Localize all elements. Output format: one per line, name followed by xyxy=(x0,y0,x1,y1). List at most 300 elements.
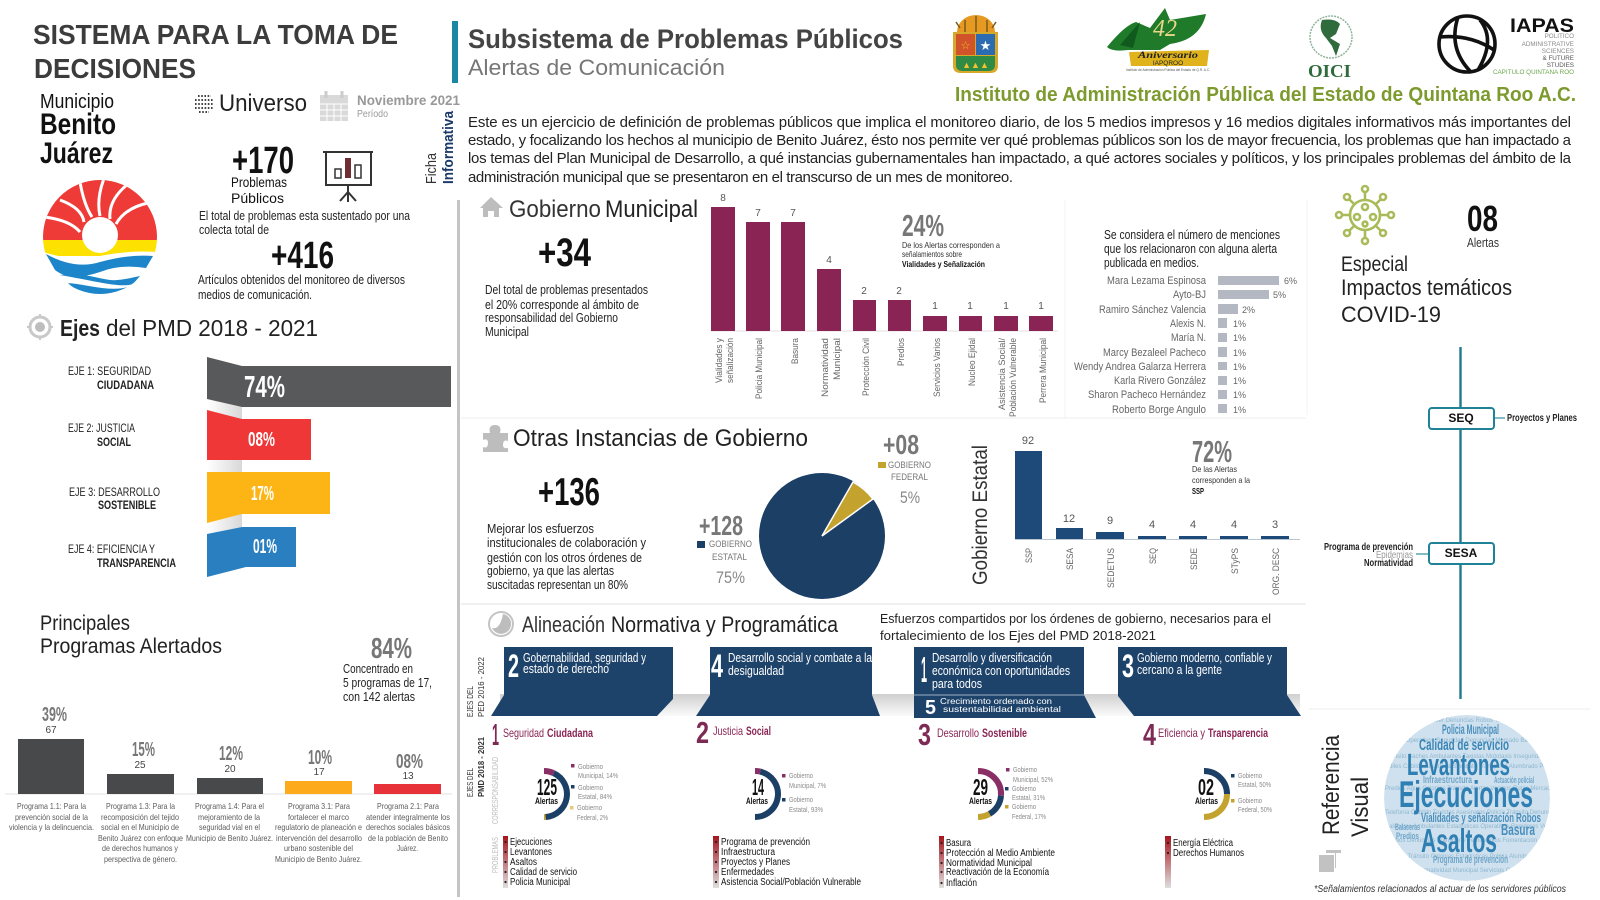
callout: 24 percent xyxy=(902,208,1000,269)
bar chart: programas: 15% xyxy=(132,739,155,761)
heading: universo: Universo xyxy=(219,90,307,117)
panel: menciones de actores xyxy=(1074,227,1297,416)
legend: gobierno estatal: ESTATAL xyxy=(712,552,747,563)
box: eje PED 4: Desarrollo social y combate a la xyxy=(728,651,872,665)
heading: eje 1 xyxy=(492,717,593,752)
timeline: Programa de prevención xyxy=(1324,542,1413,553)
intro paragraph: administración municipal que se presentaron en el transcurso de un mes de monitoreo. xyxy=(468,169,1013,186)
icon: IAPQROO anniversary logo: IAPQROO xyxy=(1153,60,1183,67)
bar chart: gobierno estatal xyxy=(1015,435,1300,595)
heading: eje 3 xyxy=(918,717,1027,752)
legend: donut 14: Gobierno xyxy=(789,795,813,804)
bar chart: problemas municipales: 1 xyxy=(932,301,938,312)
callout: 24 percent: señalamientos sobre xyxy=(902,249,962,259)
bar chart: problemas municipales: 2 xyxy=(861,286,867,297)
icon: IAPAS globe and name: IAPAS xyxy=(1510,16,1574,37)
bar chart: programas: de la población de Benito xyxy=(368,833,448,843)
text: esfuerzos compartidos: fortalecimiento de los Ejes del PMD 2018-2021 xyxy=(880,628,1156,643)
timeline: Epidemias xyxy=(1376,550,1413,561)
bar chart: problemas municipales: Policia Municipal xyxy=(754,338,765,399)
vertical label: ejes del PMD: EJES DEL xyxy=(465,768,475,797)
ejes labels: SOCIAL xyxy=(97,435,131,449)
bar chart: gobierno estatal: 4 xyxy=(1231,519,1237,531)
bar chart: problemas municipales: Vialidades y xyxy=(714,338,725,383)
callout: 72 percent xyxy=(1192,434,1250,496)
box: eje PED 1 y 5: 5 xyxy=(925,697,936,719)
bar chart: programas: social en el Municipio de xyxy=(101,822,179,832)
icon: target xyxy=(27,314,53,340)
list: problemas eje 1: Asaltos xyxy=(510,857,537,868)
list: problemas eje 1: Levantones xyxy=(510,847,552,858)
legend: donut 29: Estatal, 31% xyxy=(1012,793,1045,802)
bar chart: programas: violencia y la delincuencia. xyxy=(9,822,94,832)
legend: donut 29: Federal, 17% xyxy=(1012,812,1046,821)
bar chart: problemas municipales: Servicios Varios xyxy=(932,338,943,397)
heading: eje 2: Social xyxy=(746,724,771,738)
donut: 125 alertas: 125 xyxy=(537,774,557,800)
ejes labels: SOSTENIBLE xyxy=(98,498,156,512)
stat: problemas públicos: +170 xyxy=(232,140,294,182)
box: eje PED 1 y 5: sustentabilidad ambiental xyxy=(943,704,1061,714)
text: menciones intro xyxy=(1104,227,1280,270)
icon: Quintana Roo shield xyxy=(953,15,998,73)
box: eje PED 1 y 5: Crecimiento ordenado con xyxy=(940,696,1052,706)
bar chart: programas: urbano sostenible del xyxy=(284,843,353,853)
bar chart: gobierno estatal: 4 xyxy=(1190,519,1196,531)
legend: donut 125: Gobierno xyxy=(577,803,602,812)
bar chart: problemas municipales: 2 xyxy=(896,286,902,297)
bar chart: menciones: 1% xyxy=(1233,319,1246,329)
bar chart: programas: Programa 2.1: Para xyxy=(377,801,439,811)
bar chart: problemas municipales xyxy=(711,193,1058,417)
box: eje PED 2: 2 xyxy=(508,648,519,684)
shadow band behind PED boxes xyxy=(500,694,1300,716)
stat: artículos: +416 xyxy=(271,235,334,277)
word cloud xyxy=(1384,715,1550,881)
pie chart: estatal vs federal xyxy=(759,473,885,599)
icon: IAPAS globe and name: SCIENCES xyxy=(1542,48,1574,55)
stat: problemas públicos xyxy=(231,140,294,206)
bar chart: menciones: 1% xyxy=(1233,348,1246,358)
list: problemas eje 2: Proyectos y Planes xyxy=(721,857,790,868)
bar chart: programas: 20 xyxy=(224,764,236,775)
box: eje PED 1 y 5: Desarrollo y diversificación xyxy=(932,651,1052,665)
ficha informativa vertical label: Ficha xyxy=(423,152,440,184)
bar chart: gobierno estatal: 12 xyxy=(1063,513,1075,525)
box: eje PED 1 y 5: para todos xyxy=(932,677,982,691)
bar chart: menciones: 1% xyxy=(1233,405,1246,415)
bar chart: problemas municipales: 4 xyxy=(826,255,832,266)
donut: 02 alertas: Alertas xyxy=(1195,796,1218,806)
panel: especial covid xyxy=(1324,186,1577,699)
bar chart: gobierno estatal: 92 xyxy=(1022,435,1034,447)
word cloud: Basura xyxy=(1501,822,1535,839)
bar chart: programas: Programa 1.1: Para la xyxy=(17,801,86,811)
panel: referencia visual xyxy=(1314,715,1566,894)
stat: problemas públicos: Problemas xyxy=(231,174,287,190)
ejes labels: TRANSPARENCIA xyxy=(97,556,176,570)
list: problemas eje 2: Infraestructura xyxy=(721,847,775,858)
list: problemas eje 4: Derechos Humanos xyxy=(1173,848,1244,859)
donut: 02 alertas xyxy=(1195,771,1227,817)
stat: artículos: Artículos obtenidos del monitoreo de diversos xyxy=(198,272,405,287)
legend: donut 02: Estatal, 50% xyxy=(1238,780,1271,789)
municipality name: Juárez xyxy=(40,137,113,170)
text: gobierno municipal description: Municipal xyxy=(485,324,529,339)
icon: Quintana Roo shield: ▲▲▲ xyxy=(962,60,989,70)
ribbon chart: ejes percentages: 01% xyxy=(253,536,277,558)
vertical label: ejes del PED xyxy=(465,657,486,717)
bar chart: menciones: 1% xyxy=(1233,333,1246,343)
word cloud: Vialidades y señalización xyxy=(1421,810,1514,825)
heading: gobierno municipal: Gobierno xyxy=(509,196,601,223)
heading: impactos temáticos: Especial xyxy=(1341,253,1408,276)
bar chart: programas: fortalecer el marco xyxy=(288,812,349,822)
column: seguridad ciudadana xyxy=(492,717,618,888)
text: esfuerzos compartidos: Esfuerzos compartidos por los órdenes de gobierno, necesarios para el xyxy=(880,611,1271,626)
ejes labels xyxy=(68,364,176,570)
callout: 24 percent: 24% xyxy=(902,208,944,243)
list: problemas eje 3 xyxy=(939,836,1055,889)
legend: gobierno estatal: 75% xyxy=(716,568,745,587)
icon: universo dots xyxy=(195,96,213,112)
stat: 84 percent: Concentrado en xyxy=(343,661,413,676)
donut: 29 alertas: 29 xyxy=(973,774,988,800)
word cloud: Programa de prevención xyxy=(1433,854,1508,866)
bar chart: programas: prevención social de la xyxy=(15,812,88,822)
stat: 84 percent: con 142 alertas xyxy=(343,689,415,704)
period: Período xyxy=(357,109,388,120)
bar chart: programas: 39% xyxy=(42,704,67,726)
ficha informativa vertical label: Informativa xyxy=(440,110,457,184)
icon: reference document xyxy=(1319,850,1341,872)
callout: 24 percent: Vialidades y Señalización xyxy=(902,259,985,269)
callout: 72 percent: corresponden a la xyxy=(1192,475,1250,485)
bar chart: programas: recomposición del tejido xyxy=(101,812,179,822)
bar chart: gobierno estatal: STyPS xyxy=(1230,548,1241,574)
heading: eje 1: Seguridad xyxy=(503,726,544,740)
main title xyxy=(33,19,398,84)
text: gobierno municipal description xyxy=(485,282,648,339)
text: menciones intro: que los relacionaron con alguna alerta xyxy=(1104,241,1278,256)
bar chart: menciones: Ramiro Sánchez Valencia xyxy=(1099,304,1207,316)
ribbon chart: ejes percentages xyxy=(207,357,451,577)
bar chart: programas: 67 xyxy=(45,725,57,736)
legend: donut 125: Estatal, 84% xyxy=(578,792,612,801)
subsystem heading: Subsistema de Problemas Públicos xyxy=(468,24,903,54)
section separators xyxy=(461,200,1590,709)
word cloud: Infraestructura xyxy=(1423,775,1472,786)
bar chart: gobierno estatal: ORG. DESC xyxy=(1271,548,1282,595)
bar chart: gobierno estatal: 3 xyxy=(1272,519,1278,531)
donut: 14 alertas xyxy=(746,771,778,817)
bar chart: gobierno estatal: 9 xyxy=(1107,515,1113,527)
left column divider xyxy=(457,200,460,897)
box: eje PED 3: 3 xyxy=(1122,648,1134,684)
legend: donut 125: Gobierno xyxy=(578,783,603,792)
bar chart: programas: Benito Juárez con enfoque xyxy=(98,833,183,843)
text: otras instancias description: institucionales de colaboración y xyxy=(487,535,646,550)
legend: gobierno estatal: +128 xyxy=(699,510,743,541)
bar chart: problemas municipales: Protección Civil xyxy=(861,338,872,396)
stat: 84 percent xyxy=(343,633,432,704)
donut: 29 alertas xyxy=(969,771,1001,817)
legend: donut 02: Gobierno xyxy=(1238,771,1262,780)
bar chart: menciones: 1% xyxy=(1233,390,1246,400)
subsystem heading xyxy=(468,24,903,80)
ejes labels: EJE 4: EFICIENCIA Y xyxy=(68,542,155,556)
bar chart: menciones: 1% xyxy=(1233,376,1246,386)
icon: Quintana Roo shield: ★ xyxy=(980,38,991,53)
icon: IAPQROO anniversary logo xyxy=(1107,8,1210,72)
stat: artículos xyxy=(198,235,405,302)
heading: impactos temáticos: Impactos temáticos xyxy=(1341,275,1512,300)
bar chart: programas xyxy=(5,704,452,864)
legend: donut 125 xyxy=(570,762,618,822)
bar chart: problemas municipales: 7 xyxy=(790,208,796,219)
legend: donut 29: Gobierno xyxy=(1012,784,1036,793)
text: otras instancias description: gobierno, ya que las alertas xyxy=(487,563,614,578)
legend: gobierno federal: FEDERAL xyxy=(891,472,928,483)
bar chart: gobierno estatal: SEDETUS xyxy=(1106,548,1117,588)
list: problemas eje 3: Basura xyxy=(946,838,971,849)
bar chart: menciones: 1% xyxy=(1233,362,1246,372)
vertical label: ejes del PED: EJES DEL xyxy=(465,686,475,717)
institute name: Instituto de Administración Pública del Estado de Quintana Roo A.C. xyxy=(955,84,1576,106)
heading: eje 4: 4 xyxy=(1143,717,1157,752)
bar chart: programas: Programa 1.3: Para la xyxy=(106,801,175,811)
panel: alineación normativa y programática xyxy=(465,611,1301,889)
callout: 72 percent: 72% xyxy=(1192,434,1232,469)
legend: gobierno estatal xyxy=(697,510,752,587)
bar chart: problemas municipales: Basura xyxy=(790,337,801,364)
stat: 08 alertas: Alertas xyxy=(1467,235,1499,250)
word cloud: Predios xyxy=(1396,831,1419,841)
legend: donut 29: Gobierno xyxy=(1012,802,1036,811)
bar chart: problemas municipales: 1 xyxy=(1038,301,1044,312)
callout: 72 percent: SSP xyxy=(1192,486,1204,496)
word cloud: Policia Municipal xyxy=(1442,721,1499,737)
main title: DECISIONES xyxy=(34,53,196,84)
icon: IAPAS globe and name: ADMINISTRATIVE xyxy=(1522,41,1574,48)
intro paragraph: los temas del Plan Municipal de Desarrollo, a qué instancias gubernamentales han impactado, a qué actores sociales y políticos, y los principales problemas del ámbito de la xyxy=(468,150,1572,167)
footnote: *Señalamientos relacionados al actuar de los servidores públicos xyxy=(1314,884,1566,895)
icon: presentation board xyxy=(323,152,373,202)
timeline: SESA xyxy=(1445,546,1478,560)
icon: IAPAS globe and name: CAPITULO QUINTANA ROO xyxy=(1493,69,1574,76)
box: eje PED 2: Gobernabilidad, seguridad y xyxy=(523,651,647,665)
word cloud: Asaltos xyxy=(1421,822,1497,859)
donut: 125 alertas xyxy=(535,771,567,817)
subsystem heading: Alertas de Comunicación xyxy=(468,55,725,80)
bar chart: menciones: 5% xyxy=(1273,290,1286,300)
bar chart: problemas municipales: Asistencia Social/ xyxy=(997,338,1008,410)
bar chart: menciones: Sharon Pacheco Hernández xyxy=(1088,389,1206,401)
bar chart: programas: 17 xyxy=(313,767,325,778)
bar chart: programas: 12% xyxy=(219,743,243,765)
icon: alignment circle xyxy=(489,612,513,636)
ribbon chart: ejes percentages: 74% xyxy=(244,369,285,404)
list: problemas eje 4: Energía Eléctrica xyxy=(1173,838,1233,849)
heading: eje 1: Ciudadana xyxy=(547,726,593,740)
bar chart: problemas municipales: Normatividad xyxy=(820,338,831,397)
heading: eje 4 xyxy=(1143,717,1268,752)
list: problemas eje 3: Normatividad Municipal xyxy=(946,858,1032,869)
bar chart: gobierno estatal: SEDE xyxy=(1189,548,1200,570)
text: otras instancias description: Mejorar los esfuerzos xyxy=(487,521,594,536)
vertical label: ejes del PMD: PMD 2018 - 2021 xyxy=(476,737,486,797)
municipality name xyxy=(40,91,116,170)
heading: eje 2: 2 xyxy=(696,715,709,750)
heading: principales programas alertados xyxy=(40,612,222,658)
heading: eje 4: Eficiencia y xyxy=(1158,726,1205,740)
text: sustento del total xyxy=(199,208,411,237)
callout: 24 percent: De los Alertas corresponden a xyxy=(902,240,1000,250)
icon: IAPAS globe and name: & FUTURE xyxy=(1542,55,1574,62)
bar chart: programas: 13 xyxy=(402,771,414,782)
bar chart: problemas municipales: Nucleo Ejidal xyxy=(967,338,978,386)
text: menciones intro: publicada en medios. xyxy=(1104,255,1199,270)
text: gobierno municipal description: el 20% corresponde al ámbito de xyxy=(485,297,639,312)
legend: gobierno federal: GOBIERNO xyxy=(888,460,931,471)
text: otras instancias description: gestión con los otros órdenes de xyxy=(487,550,642,565)
icon: IAPAS globe and name: STUDIES xyxy=(1547,62,1574,69)
icon: IAPAS globe and name xyxy=(1439,16,1574,76)
bar chart: problemas municipales: Municipal xyxy=(832,338,843,380)
bar chart: gobierno estatal: SESA xyxy=(1065,547,1076,570)
heading: impactos temáticos xyxy=(1341,253,1512,327)
legend: gobierno federal: 5% xyxy=(900,488,920,507)
bar chart: menciones: Mara Lezama Espinosa xyxy=(1107,275,1207,287)
bar chart: menciones: Roberto Borge Angulo xyxy=(1112,404,1206,416)
word cloud: Calidad de servicio xyxy=(1419,737,1509,754)
heading: eje 2 xyxy=(696,715,771,750)
legend: donut 125: Gobierno xyxy=(578,762,603,771)
text: otras instancias description: suscitadas representan un 80% xyxy=(487,577,628,592)
heading: eje 3: Sostenible xyxy=(982,726,1027,740)
list: problemas eje 2: Asistencia Social/Población Vulnerable xyxy=(721,877,861,888)
municipality name: Municipio xyxy=(40,91,114,113)
list: problemas eje 1: Policia Municipal xyxy=(510,877,570,888)
ficha informativa vertical label xyxy=(423,110,457,184)
panel: gobierno municipal xyxy=(480,193,1058,417)
text: otras instancias description xyxy=(487,521,646,592)
column: eficiencia y transparencia xyxy=(1143,717,1272,888)
legend: donut 125: Municipal, 14% xyxy=(578,771,618,780)
list: problemas eje 1 xyxy=(503,836,577,888)
intro paragraph: estado, y focalizando los hechos al municipio de Benito Juárez, ésto nos permite ver qué problemas públicos son los de mayor frecuencia, los problemas que han impactado a xyxy=(468,132,1572,149)
timeline: Proyectos y Planes xyxy=(1507,413,1577,424)
list: problemas eje 1: Ejecuciones xyxy=(510,837,552,848)
box: eje PED 2: estado de derecho xyxy=(523,662,609,676)
legend: gobierno federal: +08 xyxy=(883,429,919,460)
box: eje PED 3 xyxy=(1118,647,1301,716)
donut: 14 alertas: Alertas xyxy=(746,796,768,806)
legend: donut 14: Estatal, 93% xyxy=(789,805,823,814)
stat: 08 alertas: 08 xyxy=(1467,198,1498,239)
bar chart: programas: Municipio de Benito Juárez. xyxy=(275,854,362,864)
legend: donut 02: Federal, 50% xyxy=(1238,805,1272,814)
text: sustento del total: colecta total de xyxy=(199,222,269,237)
vertical labels: corresponsabilidad and problemas: PROBLEMAS xyxy=(491,837,500,873)
bar chart: gobierno estatal: SEQ xyxy=(1148,548,1159,564)
heading: eje 4: Transparencia xyxy=(1208,726,1268,740)
text: esfuerzos compartidos xyxy=(880,611,1271,643)
vertical label: ejes del PMD xyxy=(465,737,486,797)
accent bar xyxy=(452,21,458,83)
ejes labels: EJE 1: SEGURIDAD xyxy=(68,364,151,378)
bar chart: programas: derechos sociales básicos xyxy=(366,822,450,832)
column: desarrollo sostenible xyxy=(918,717,1055,889)
list: problemas eje 2: Enfermedades xyxy=(721,867,774,878)
word cloud: Levantones xyxy=(1407,747,1510,782)
bar chart: menciones: Marcy Bezaleel Pacheco xyxy=(1103,347,1206,359)
stat: 84 percent: 5 programas de 17, xyxy=(343,675,432,690)
ejes labels: CIUDADANA xyxy=(97,378,154,392)
list: problemas eje 3: Reactivación de la Economía xyxy=(946,867,1049,878)
bar chart: programas: regulatorio de planeación e xyxy=(275,822,362,832)
box: eje PED 2 xyxy=(491,647,673,716)
heading: alineación: Alineación xyxy=(522,612,605,637)
panel: otras instancias de gobierno xyxy=(483,425,1300,599)
intro paragraph: Este es un ejercicio de definición de problemas públicos que implica el monitoreo diario, de los 5 medios impresos y 16 medios digitales informativos más importantes del xyxy=(468,114,1571,131)
vertical labels: corresponsabilidad and problemas: CORRESPONSABILIDAD xyxy=(491,757,500,824)
legend: donut 29: Municipal, 52% xyxy=(1013,775,1053,784)
ribbon chart: ejes percentages: 17% xyxy=(251,483,274,505)
icon: house xyxy=(480,197,503,217)
callout: 72 percent: De las Alertas xyxy=(1192,464,1237,474)
municipality name: Benito xyxy=(40,108,116,141)
bar chart: programas: Programa 3.1: Para xyxy=(288,801,350,811)
heading: gobierno municipal: Municipal xyxy=(605,196,698,223)
icon: IAPQROO anniversary logo: Aniversario xyxy=(1137,50,1199,60)
period: Noviembre 2021 xyxy=(357,92,460,108)
ejes labels: EJE 2: JUSTICIA xyxy=(68,421,135,435)
legend: donut 14 xyxy=(782,771,826,814)
bar chart: menciones: Alexis N. xyxy=(1170,318,1206,330)
bar chart: programas: atender integralmente los xyxy=(366,812,450,822)
vertical label: ejes del PED: PED 2016 - 2022 xyxy=(476,657,486,717)
icon: IAPQROO anniversary logo: 42 xyxy=(1153,16,1177,42)
legend: gobierno estatal: GOBIERNO xyxy=(709,539,752,550)
heading: eje 3: 3 xyxy=(918,717,931,752)
bar chart: programas: Juárez. xyxy=(397,843,418,853)
list: problemas eje 4 xyxy=(1165,836,1244,888)
bar chart: programas: seguridad vial en el xyxy=(199,822,260,832)
heading: referencia visual: Visual xyxy=(1347,777,1374,837)
stat: +136: +136 xyxy=(538,471,600,514)
box: eje PED 1 y 5 xyxy=(914,647,1096,719)
icon: puzzle piece xyxy=(483,425,508,452)
bar chart: problemas municipales: 7 xyxy=(755,208,761,219)
icon: calendar xyxy=(320,91,348,121)
stat: 84 percent: 84% xyxy=(371,633,412,665)
icon: IAPQROO anniversary logo: Instituto de Administración Pública del Estado de Q.R. A.C. xyxy=(1126,68,1210,72)
heading: eje 2: Justicia xyxy=(713,724,743,738)
heading: otras instancias: Otras Instancias de Gobierno xyxy=(513,425,808,452)
vertical label: gobierno estatal: Gobierno Estatal xyxy=(969,445,992,585)
legend: donut 29: Gobierno xyxy=(1013,765,1037,774)
bar chart: programas: 25 xyxy=(134,760,146,771)
bar chart: programas: 08% xyxy=(396,751,423,773)
bar chart: programas: 10% xyxy=(308,747,332,769)
heading: alineación: Normativa y Programática xyxy=(611,612,839,637)
bar chart: problemas municipales: 1 xyxy=(967,301,973,312)
stat: 08 alertas xyxy=(1467,198,1499,250)
icon: OICI logo xyxy=(1308,16,1352,81)
stat: artículos: medios de comunicación. xyxy=(198,287,312,302)
list: problemas eje 1: Calidad de servicio xyxy=(510,867,577,878)
